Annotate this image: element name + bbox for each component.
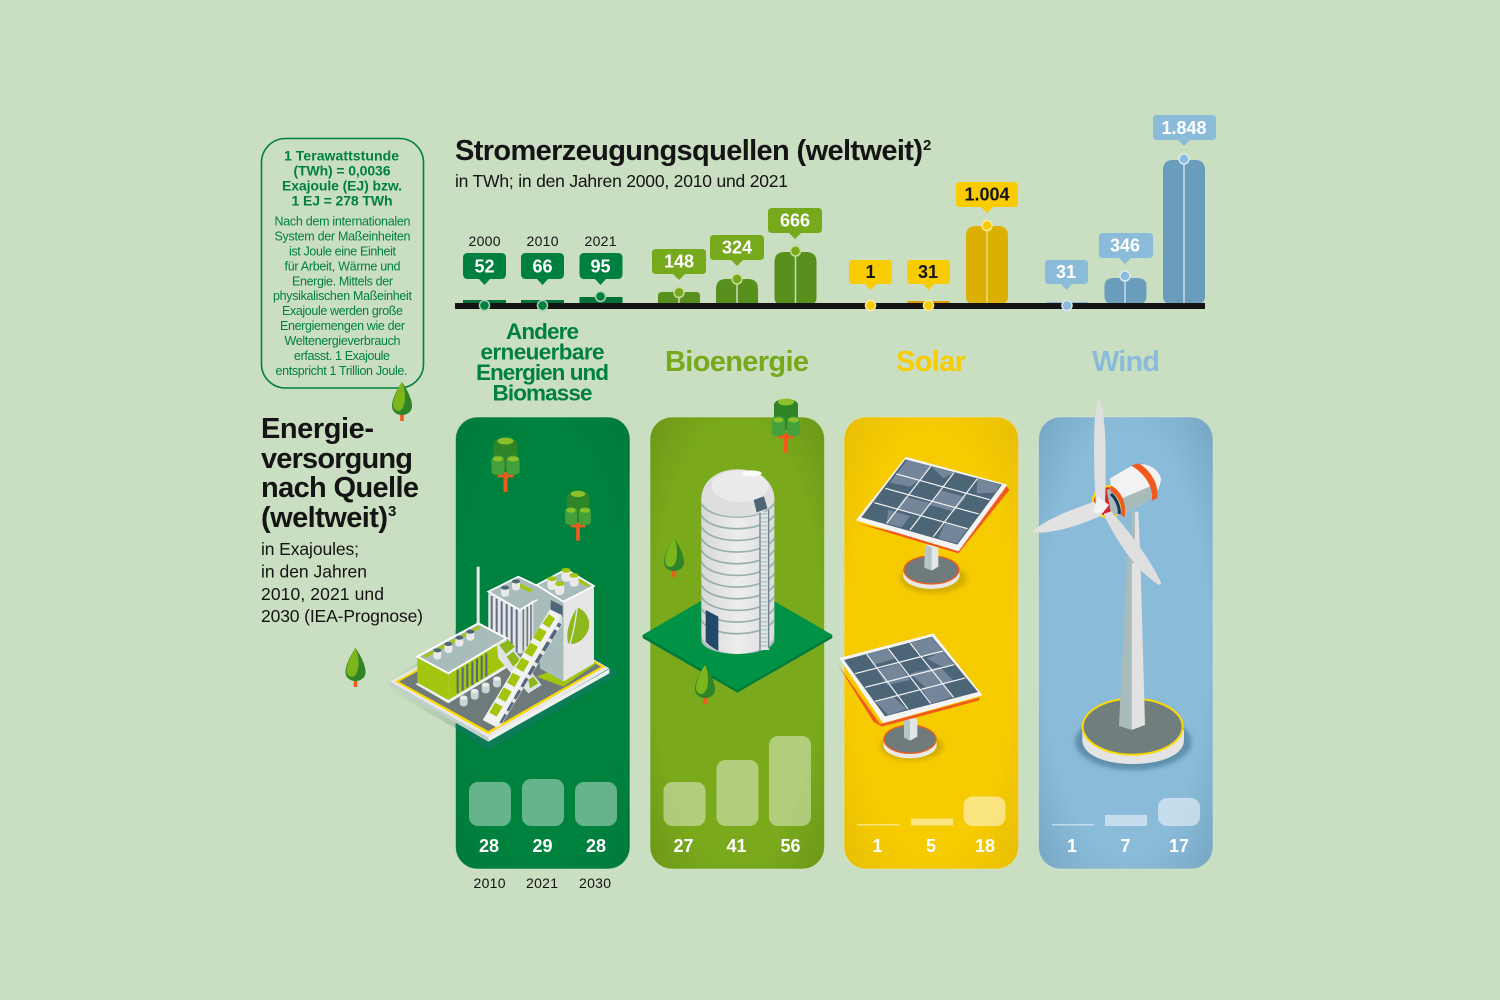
heading: Stromerzeugungsquellen: 2 (923, 137, 931, 154)
category label: other renewables: Andere (506, 319, 579, 344)
info box: unit conversion: für Arbeit, Wärme und (284, 260, 401, 274)
category label: other renewables: Energien und (476, 360, 609, 385)
value numbers: 31 (918, 262, 938, 282)
data points (480, 154, 1189, 310)
info box: unit conversion: 1 EJ = 278 TWh (292, 192, 392, 208)
value numbers: 1.004 (964, 184, 1010, 204)
icon: conifer tree by box (392, 382, 412, 421)
bars: wind (1046, 160, 1205, 304)
value numbers: 31 (1056, 262, 1076, 282)
small bar values: 1 (1067, 836, 1077, 856)
icon: silo with platform (643, 469, 832, 693)
icon: cluster tree bio (772, 398, 800, 453)
icon: solar panel bottom (837, 634, 982, 761)
info box: unit conversion: 1 Terawattstunde (284, 148, 399, 164)
small bars: solar (858, 796, 1006, 826)
category label: solar: Solar (896, 346, 966, 378)
nacelle (1110, 464, 1161, 514)
category label: bioenergy: Bioenergie (665, 346, 809, 378)
value tags: bioenergy (652, 208, 822, 280)
rotor ring (1092, 485, 1125, 518)
bar chart: electricity generation (455, 115, 1216, 310)
value tags: solar (849, 182, 1018, 290)
panel: wind (1038, 417, 1213, 869)
info box: unit conversion: System der Maßeinheiten (274, 230, 411, 244)
bars: other renewables (463, 297, 622, 305)
small bar values: 29 (532, 836, 553, 856)
small bar values (479, 836, 1189, 856)
leaf logo (567, 607, 589, 644)
category label: other renewables: Biomasse (492, 380, 592, 406)
value numbers: 1 (865, 262, 876, 282)
icon: conifer tree bio upper (664, 538, 684, 577)
info box: unit conversion: entspricht 1 Trillion Joule. (276, 364, 408, 378)
right tower (537, 585, 563, 682)
bars: solar (908, 226, 1008, 304)
panel: solar (844, 417, 1018, 869)
value tags: other renewables (463, 253, 622, 285)
small bar values: 18 (975, 836, 995, 856)
small bar values: 28 (586, 836, 606, 856)
heading: Energieversorgung nach Quelle: 2030 (IEA-Prognose) (261, 606, 423, 626)
info box: unit conversion: (TWh) = 0,0036 (294, 162, 391, 178)
chimney (477, 567, 480, 633)
value numbers: 1.848 (1161, 118, 1207, 138)
info box: unit conversion: Weltenergieverbrauch (284, 334, 401, 348)
info box: unit conversion: Exajoule werden große (282, 304, 403, 318)
value numbers: 346 (1110, 236, 1140, 256)
value numbers: 666 (780, 210, 810, 230)
year labels: 2000 (468, 233, 501, 249)
tall back building (488, 577, 553, 663)
low building (415, 638, 506, 703)
small bar values: 28 (479, 836, 499, 856)
info box: unit conversion: Energiemengen wie der (280, 319, 405, 333)
heading: Energieversorgung nach Quelle: 3 (388, 503, 396, 520)
heading: Energieversorgung nach Quelle: nach Quelle (261, 472, 419, 504)
icon: conifer tree bio lower (695, 665, 715, 704)
heading: Energieversorgung nach Quelle: 2010, 2021 und (261, 584, 384, 604)
info box: unit conversion: erfasst. 1 Exajoule (294, 349, 390, 363)
info box: unit conversion: ist Joule eine Einheit (289, 244, 397, 258)
year axis labels: 2021 (526, 875, 558, 891)
value numbers: 52 (474, 256, 495, 276)
heading: Energieversorgung nach Quelle: (weltweit) (261, 502, 388, 534)
info box: unit conversion: physikalischen Maßeinheit (273, 289, 413, 303)
heading: Stromerzeugungsquellen (455, 135, 931, 191)
value numbers: 324 (722, 238, 752, 258)
small bar values: 56 (780, 836, 801, 856)
category label: other renewables (476, 319, 609, 406)
year labels: 2021 (584, 233, 617, 249)
small bars: wind (1052, 798, 1200, 826)
category label: wind: Wind (1092, 346, 1160, 378)
panel: other renewables (456, 417, 630, 869)
icon: biomass plant (380, 567, 620, 751)
heading: Energieversorgung nach Quelle: versorgung (261, 443, 413, 475)
year axis labels: 2010 (474, 875, 506, 891)
value numbers: 66 (532, 256, 553, 276)
value tags: wind (1045, 115, 1216, 290)
year labels (468, 233, 617, 249)
axis (455, 303, 1205, 309)
heading: Stromerzeugungsquellen: in TWh; in den Jahren 2000, 2010 und 2021 (455, 171, 788, 191)
small bars: other renewables (469, 779, 617, 826)
heading: Energieversorgung nach Quelle: in Exajoules; (261, 539, 359, 559)
small bar values: 41 (726, 836, 747, 856)
small bar values: 7 (1120, 836, 1131, 856)
value numbers: 148 (664, 252, 694, 272)
tanks (460, 677, 501, 706)
rear conveyor (497, 640, 542, 693)
year axis labels: 2030 (579, 875, 611, 891)
heading: Stromerzeugungsquellen: Stromerzeugungsquellen (weltweit) (455, 135, 923, 167)
heading: Energieversorgung nach Quelle: Energie- (261, 413, 374, 445)
panel: bioenergy (650, 417, 824, 869)
small bar values: 17 (1169, 836, 1189, 856)
small bars: bioenergy (664, 736, 811, 826)
small bar values: 1 (872, 836, 883, 856)
info box: unit conversion: Exajoule (EJ) bzw. (282, 178, 402, 194)
small bar values: 27 (673, 836, 694, 856)
info box: unit conversion (262, 138, 424, 388)
blades (1094, 398, 1106, 503)
icon: conifer tree left (346, 648, 366, 687)
front conveyor (497, 615, 562, 727)
trees (346, 382, 800, 704)
heading: Energieversorgung nach Quelle: in den Jahren (261, 562, 367, 582)
bars: bioenergy (658, 252, 816, 304)
year labels: 2010 (526, 233, 559, 249)
value numbers (474, 118, 1207, 282)
icon: wind turbine (1033, 398, 1192, 770)
small bar values: 5 (926, 836, 936, 856)
info box: unit conversion: Energie. Mittels der (292, 274, 393, 288)
info box: unit conversion: Nach dem internationalen (274, 214, 411, 228)
year axis labels (474, 875, 611, 891)
icon: cluster tree green lower (565, 491, 591, 541)
category label: other renewables: erneuerbare (480, 340, 604, 364)
heading: Energieversorgung nach Quelle (261, 413, 423, 626)
icon: solar panel top (857, 457, 1009, 593)
value numbers: 95 (590, 256, 611, 276)
icon: cluster tree green upper (492, 438, 520, 492)
bar center lines (679, 159, 1184, 304)
